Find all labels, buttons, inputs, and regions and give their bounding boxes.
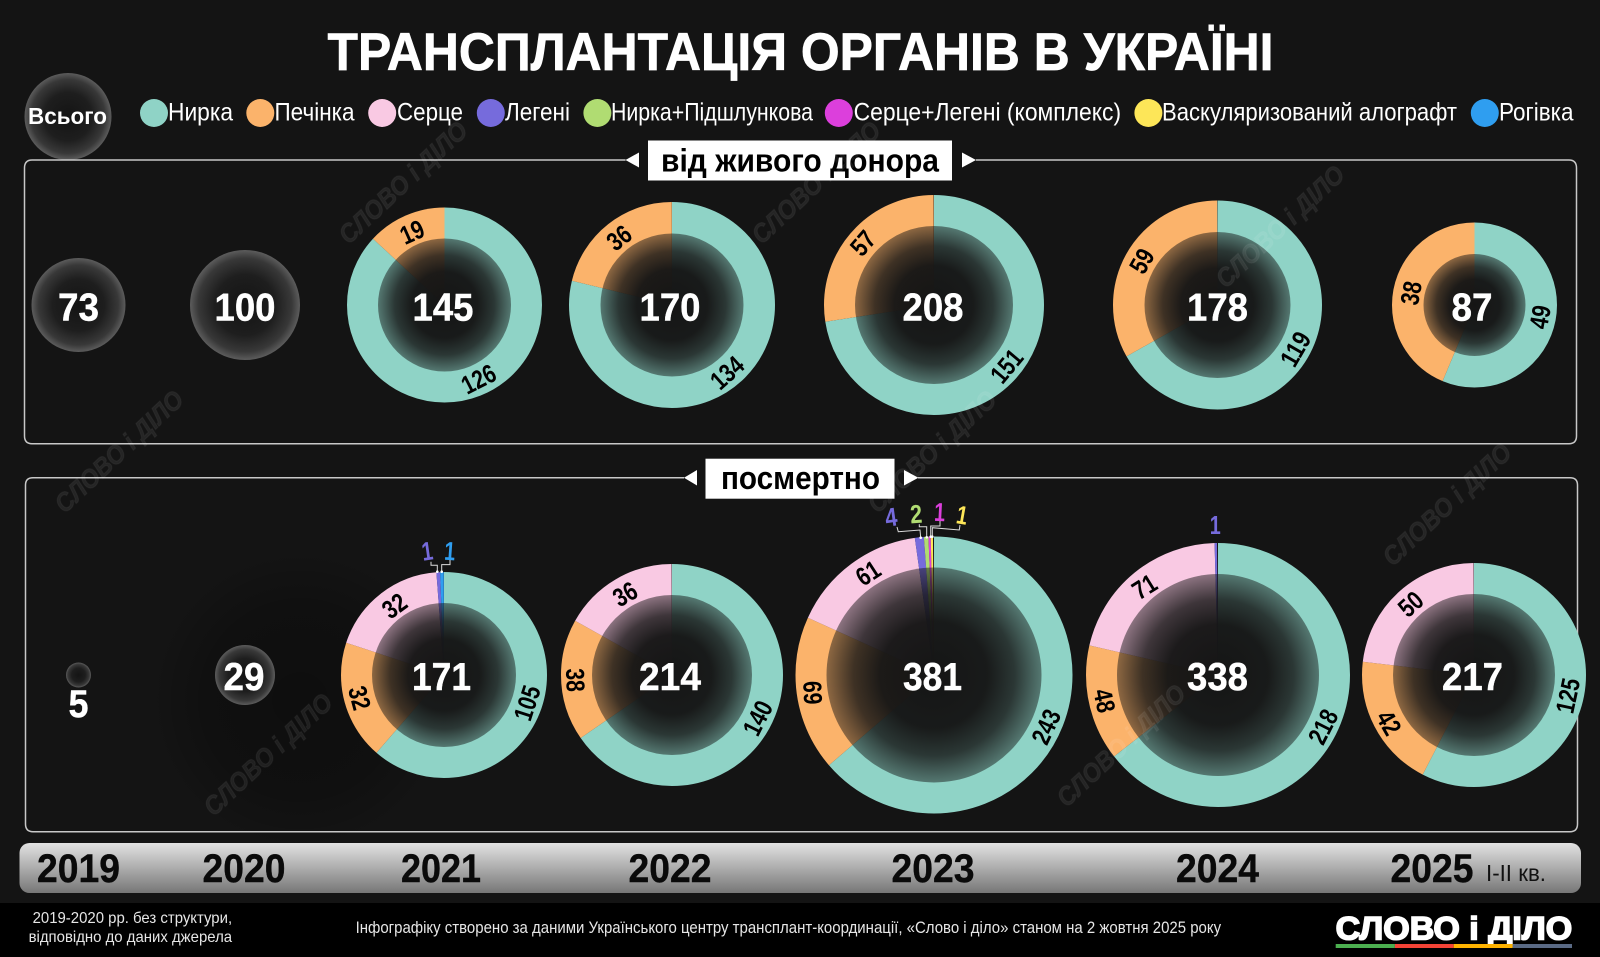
donut: 2023 deceased donor: 69 bbox=[797, 680, 828, 705]
footnote: відповідно до даних джерела bbox=[29, 929, 232, 946]
bubble: Всього legend: Всього bbox=[28, 103, 107, 129]
watermarks: СЛОВО і ДІЛО bbox=[197, 687, 338, 822]
donut: 2025 live donor bbox=[1394, 254, 1557, 356]
arrow: left bbox=[626, 152, 639, 168]
legend item: Нирка: Нирка bbox=[168, 98, 233, 126]
legend item: Серце+Легені: Серце+Легені (комплекс) bbox=[854, 98, 1121, 126]
donut: 2023 live donor: 208 bbox=[902, 286, 964, 330]
watermarks bbox=[48, 115, 1517, 822]
watermarks: СЛОВО і ДІЛО bbox=[861, 384, 1002, 519]
heading: посмертно: посмертно bbox=[721, 460, 880, 496]
callout: vascularized allograft 1: 1 bbox=[954, 499, 970, 531]
donut: 2024 deceased donor: 71 bbox=[1127, 568, 1162, 606]
callout: cornea 1 bbox=[440, 536, 456, 573]
donut: 2024 live donor bbox=[1123, 232, 1317, 378]
legend item: Печінка: Печінка bbox=[274, 98, 355, 126]
watermarks: СЛОВО і ДІЛО bbox=[1209, 159, 1350, 294]
donut: 2024 live donor: 119 bbox=[1274, 326, 1317, 372]
legend item: Печінка bbox=[246, 98, 355, 127]
panel: посмертно bbox=[26, 459, 1578, 832]
callout: lungs 4: 4 bbox=[883, 501, 900, 533]
year: 2023: 2023 bbox=[892, 847, 974, 891]
donut: 2022 deceased donor: 140 bbox=[736, 696, 779, 740]
footnote bbox=[29, 910, 232, 946]
arrow: right bbox=[962, 152, 976, 168]
donut: 2025 deceased donor bbox=[1370, 585, 1586, 756]
donut: 2022 deceased donor: 36 bbox=[607, 575, 643, 613]
legend item: Рогівка: Рогівка bbox=[1499, 98, 1574, 126]
callout: lungs 1: 1 bbox=[1210, 510, 1221, 540]
donut: 2025 deceased donor: 50 bbox=[1392, 585, 1430, 623]
bubble: Всього legend bbox=[24, 73, 112, 160]
logo: СЛОВО і ДІЛО bbox=[1336, 910, 1572, 946]
callout: kidney and pancreas 2: 2 bbox=[909, 499, 923, 529]
year: 2020: 2020 bbox=[202, 847, 286, 891]
donut: 2022 live donor bbox=[600, 219, 750, 396]
callout: heart and lungs 1: 1 bbox=[933, 497, 946, 527]
year: 2019: 2019 bbox=[37, 847, 120, 891]
donut: 2022 deceased donor: 214 bbox=[639, 656, 701, 699]
bubble: 2019 live donor bbox=[32, 258, 126, 352]
donut: 2022 live donor: 134 bbox=[704, 350, 750, 396]
donut: 2023 live donor: 57 bbox=[844, 224, 882, 262]
year axis bar bbox=[20, 843, 1581, 893]
bubble: 2020 deceased donor bbox=[215, 645, 275, 705]
legend item: Нирка bbox=[140, 98, 233, 127]
donut: 2022 deceased donor bbox=[560, 575, 779, 755]
donut: 2021 deceased donor: 32 bbox=[376, 587, 413, 625]
bubble: 2019 deceased donor bbox=[66, 662, 91, 726]
year: 2022: 2022 bbox=[628, 847, 712, 891]
donut: 2025 deceased donor: 125 bbox=[1550, 675, 1586, 716]
footnote: 2019-2020 рр. без структури, bbox=[33, 910, 232, 927]
donut: 2023 deceased donor bbox=[797, 497, 1067, 782]
watermarks: СЛОВО і ДІЛО bbox=[1050, 678, 1191, 813]
callout: lungs 4 bbox=[883, 501, 922, 539]
donut: 2024 live donor: 59 bbox=[1123, 243, 1161, 279]
heading: від живого донора: від живого донора bbox=[661, 142, 939, 178]
bubble: 2020 deceased donor: 29 bbox=[224, 656, 264, 699]
source note: Інфографіку створено за даними Українського центру трансплант-координації, «Слово і діло» станом на 2 жовтня 2025 року bbox=[356, 919, 1222, 937]
donut: 2023 deceased donor: 243 bbox=[1025, 705, 1067, 749]
donut: 2021 live donor: 126 bbox=[456, 358, 501, 400]
donut: 2022 live donor: 36 bbox=[601, 219, 638, 257]
callout: cornea 1: 1 bbox=[443, 536, 456, 566]
bubble: 2020 live donor: 100 bbox=[214, 286, 276, 330]
donut: 2025 live donor: 38 bbox=[1394, 279, 1428, 307]
watermarks: СЛОВО і ДІЛО bbox=[745, 115, 886, 250]
year: 2024: 2024 bbox=[1176, 847, 1260, 891]
callout: heart and lungs 1 bbox=[929, 497, 946, 538]
year: 2025: 2025 bbox=[1390, 847, 1474, 891]
legend item: Легені bbox=[477, 98, 570, 127]
donut: 2023 live donor: 151 bbox=[984, 343, 1029, 389]
callout: vascularized allograft 1 bbox=[931, 499, 970, 538]
legend item: Рогівка bbox=[1471, 98, 1574, 127]
bubble: 2019 deceased donor: 5 bbox=[68, 683, 88, 726]
donut: 2025 live donor: 87 bbox=[1452, 286, 1492, 330]
watermarks: СЛОВО і ДІЛО bbox=[332, 115, 473, 250]
bubble: 2020 live donor bbox=[190, 250, 300, 360]
legend item: Серце bbox=[368, 98, 463, 127]
donut: 2021 deceased donor bbox=[342, 535, 547, 747]
year: 2021: 2021 bbox=[401, 847, 481, 891]
arrow: right bbox=[904, 470, 918, 486]
watermarks: СЛОВО і ДІЛО bbox=[1376, 437, 1517, 572]
donut: 2021 live donor: 145 bbox=[412, 286, 474, 330]
donut: 2022 deceased donor: 38 bbox=[560, 668, 591, 692]
donut: 2022 live donor: 170 bbox=[640, 286, 700, 330]
legend bbox=[140, 98, 1574, 127]
arrow: left bbox=[684, 470, 697, 486]
bubble: 2019 live donor: 73 bbox=[58, 286, 99, 330]
year: 2025 bbox=[1390, 847, 1546, 891]
panel: від живого донора bbox=[24, 140, 1576, 444]
callout: lungs 1: 1 bbox=[420, 535, 435, 567]
legend item: Серце: Серце bbox=[397, 98, 463, 126]
donut: 2021 deceased donor: 171 bbox=[412, 656, 471, 699]
watermarks: СЛОВО і ДІЛО bbox=[48, 384, 189, 519]
donut: 2025 deceased donor: 42 bbox=[1370, 705, 1408, 740]
legend item: Легені: Легені bbox=[505, 98, 570, 126]
legend item: Нирка+Підшлункова: Нирка+Підшлункова bbox=[611, 98, 813, 126]
donut: 2024 deceased donor bbox=[1087, 510, 1344, 776]
footer band bbox=[0, 903, 1600, 957]
donut: 2024 live donor: 178 bbox=[1187, 286, 1248, 330]
callout: kidney and pancreas 2 bbox=[909, 499, 928, 539]
title: ТРАНСПЛАНТАЦІЯ ОРГАНІВ В УКРАЇНІ bbox=[328, 23, 1274, 82]
donut: 2021 deceased donor: 105 bbox=[507, 682, 547, 724]
donut: 2021 deceased donor: 32 bbox=[342, 683, 377, 713]
donut: 2024 deceased donor: 338 bbox=[1187, 656, 1248, 699]
donut: 2023 live donor bbox=[844, 224, 1029, 389]
donut: 2023 deceased donor: 61 bbox=[850, 554, 886, 592]
donut: 2023 deceased donor: 381 bbox=[903, 656, 962, 699]
year: 2025: І-ІІ кв. bbox=[1486, 860, 1546, 886]
donut: 2024 deceased donor: 218 bbox=[1302, 704, 1344, 749]
donut: 2024 deceased donor: 48 bbox=[1087, 686, 1122, 715]
donut: 2021 live donor: 19 bbox=[395, 214, 429, 251]
legend item: Васкуляризований алографт: Васкуляризований алографт bbox=[1162, 98, 1457, 126]
donut: 2025 live donor: 49 bbox=[1523, 303, 1557, 331]
donut: 2025 deceased donor: 217 bbox=[1442, 656, 1503, 699]
donut: 2021 live donor bbox=[378, 214, 511, 400]
